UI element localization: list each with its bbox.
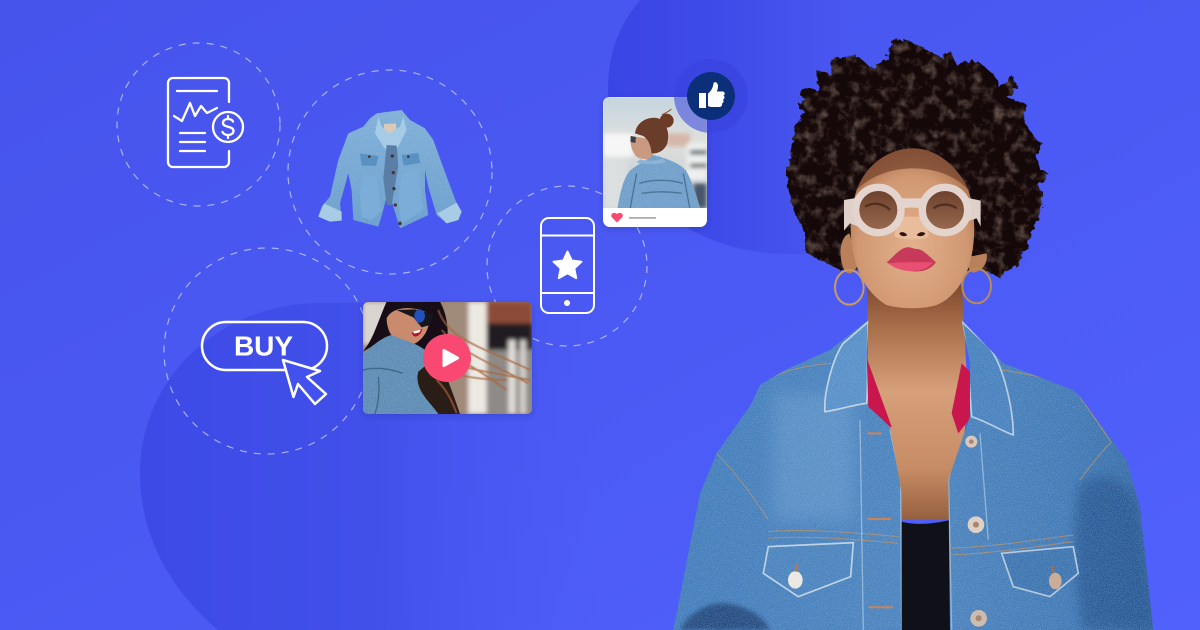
nostrils [899,232,925,236]
left sleeve shadow [680,603,770,630]
button label: BUY [234,330,293,362]
face [851,148,974,308]
ears [841,233,987,273]
pocket flap left [763,543,853,597]
sunglasses [844,187,981,233]
button outline [202,322,327,370]
collar right [962,322,1013,435]
hair [786,38,1048,278]
jacket photo [318,110,462,228]
person in denim jacket [660,38,1170,630]
photo: woman from behind [603,97,707,210]
jacket body [660,320,1170,630]
pocket flap right [1002,547,1078,597]
placket right [949,430,988,630]
like count line [629,217,656,219]
scarf [865,353,972,433]
forehead shadow [857,148,968,190]
lips [887,247,936,271]
background blob: lower left [140,303,600,630]
icon: play button [423,334,471,382]
icon: thumbs up badge [674,59,748,133]
social post card [603,97,707,227]
icon: cursor [283,360,326,404]
dashed circle: jacket [288,70,492,274]
buy button with cursor [202,322,327,404]
icon: heart [611,213,623,222]
earring right [962,269,991,303]
icon: phone with star [541,218,594,313]
denim jacket [660,320,1170,630]
pale wash on chest [773,393,853,520]
background blob: top [608,0,840,254]
video thumbnail [363,302,532,414]
black top [902,520,953,630]
earring left [835,270,864,305]
collar left [825,322,868,412]
dashed circle: buy [164,248,370,454]
dashed circle: report [117,43,280,206]
right sleeve shadow [1075,476,1157,630]
photo: woman with sunglasses [363,302,532,414]
jacket seams [717,363,1112,555]
neck [867,285,968,520]
icon: financial report with dollar [168,78,243,167]
nose [895,217,929,239]
placket left [860,420,902,630]
buttonholes and buttons [788,433,1062,627]
dashed circle: phone [487,186,647,346]
